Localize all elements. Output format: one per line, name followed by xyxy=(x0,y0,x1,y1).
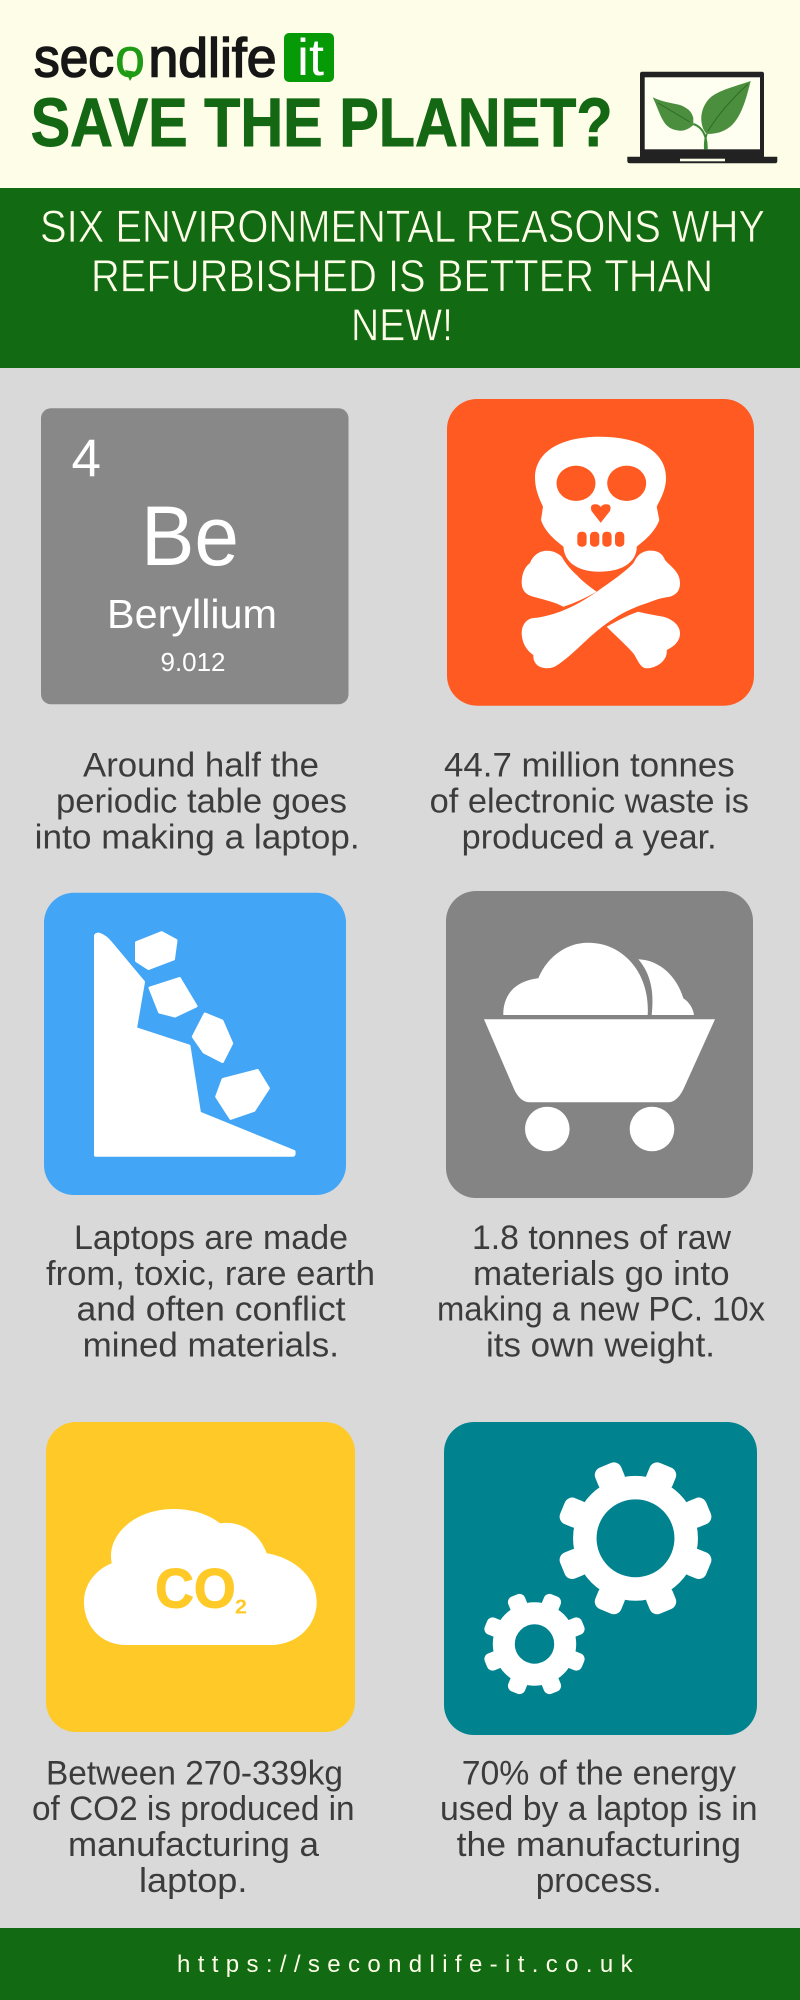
logo: secondlife it: ndlife xyxy=(148,26,276,88)
footer xyxy=(0,1928,800,2000)
banner panel xyxy=(0,188,800,368)
element tile text: Be xyxy=(141,489,239,583)
banner heading: NEW! xyxy=(351,300,453,351)
caption: toxic materials: Laptops are made xyxy=(74,1219,348,1257)
caption: energy: used by a laptop is in xyxy=(440,1790,758,1828)
caption: e-waste: of electronic waste is xyxy=(430,783,749,821)
element tile text xyxy=(72,430,277,677)
icon: CO2 cloud: CO xyxy=(155,1556,236,1620)
caption: raw materials: 1.8 tonnes of raw xyxy=(472,1219,731,1257)
caption: raw materials xyxy=(437,1219,765,1365)
panel: toxic materials xyxy=(44,893,375,1365)
icon: CO2 cloud: 2 xyxy=(235,1596,247,1618)
caption: CO2 xyxy=(32,1755,355,1900)
logo: secondlife it: it xyxy=(297,29,325,87)
caption: toxic materials: and often conflict xyxy=(76,1291,346,1329)
caption: e-waste xyxy=(430,747,749,856)
header panel xyxy=(0,0,800,188)
footer url: https://secondlife-it.co.uk xyxy=(177,1951,634,1978)
icon: mine cart xyxy=(484,943,715,1151)
caption: periodic table: periodic table goes xyxy=(56,783,347,821)
caption: toxic materials xyxy=(46,1219,375,1365)
caption: periodic table: into making a laptop. xyxy=(35,818,360,856)
caption: e-waste: produced a year. xyxy=(462,818,717,856)
caption: raw materials: its own weight. xyxy=(486,1327,715,1365)
skull features xyxy=(556,466,646,547)
caption: CO2: manufacturing a xyxy=(68,1826,319,1864)
caption: CO2: laptop. xyxy=(139,1862,247,1900)
caption: toxic materials: mined materials. xyxy=(83,1327,339,1365)
caption: periodic table xyxy=(35,747,360,856)
banner heading: REFURBISHED IS BETTER THAN xyxy=(91,251,713,302)
caption: e-waste: 44.7 million tonnes xyxy=(444,747,735,785)
panel: e-waste xyxy=(430,399,754,856)
element tile text: Beryllium xyxy=(107,591,277,637)
icon: small gear xyxy=(483,1592,586,1696)
banner heading xyxy=(40,201,765,351)
caption: energy: process. xyxy=(536,1862,662,1900)
panel: raw materials xyxy=(437,891,765,1365)
element tile text: 4 xyxy=(72,430,101,489)
caption: toxic materials: from, toxic, rare earth xyxy=(46,1255,375,1293)
icon: rockfall xyxy=(96,933,294,1155)
caption: periodic table: Around half the xyxy=(83,747,319,785)
icon: laptop with leaves xyxy=(627,72,777,163)
caption: raw materials: making a new PC. 10x xyxy=(437,1291,765,1329)
caption: energy: 70% of the energy xyxy=(462,1755,736,1793)
icon: CO2 cloud xyxy=(84,1509,317,1645)
caption: energy xyxy=(440,1755,758,1900)
skull xyxy=(535,437,666,572)
crossbones xyxy=(522,551,680,668)
panel: CO2 xyxy=(32,1422,355,1900)
logo: secondlife it: o xyxy=(115,26,145,88)
logo: secondlife it xyxy=(34,26,334,88)
logo: secondlife it: sec xyxy=(34,26,114,88)
panel: periodic table xyxy=(35,408,360,856)
icon: large gear xyxy=(557,1460,714,1617)
icon: skull and crossbones xyxy=(522,437,680,668)
title: SAVE THE PLANET? xyxy=(31,84,613,161)
caption: energy: the manufacturing xyxy=(457,1826,741,1864)
caption: CO2: Between 270-339kg xyxy=(46,1755,343,1793)
caption: CO2: of CO2 is produced in xyxy=(32,1790,355,1828)
panel: energy xyxy=(440,1422,758,1900)
element tile text: 9.012 xyxy=(160,647,226,677)
caption: raw materials: materials go into xyxy=(473,1255,730,1293)
